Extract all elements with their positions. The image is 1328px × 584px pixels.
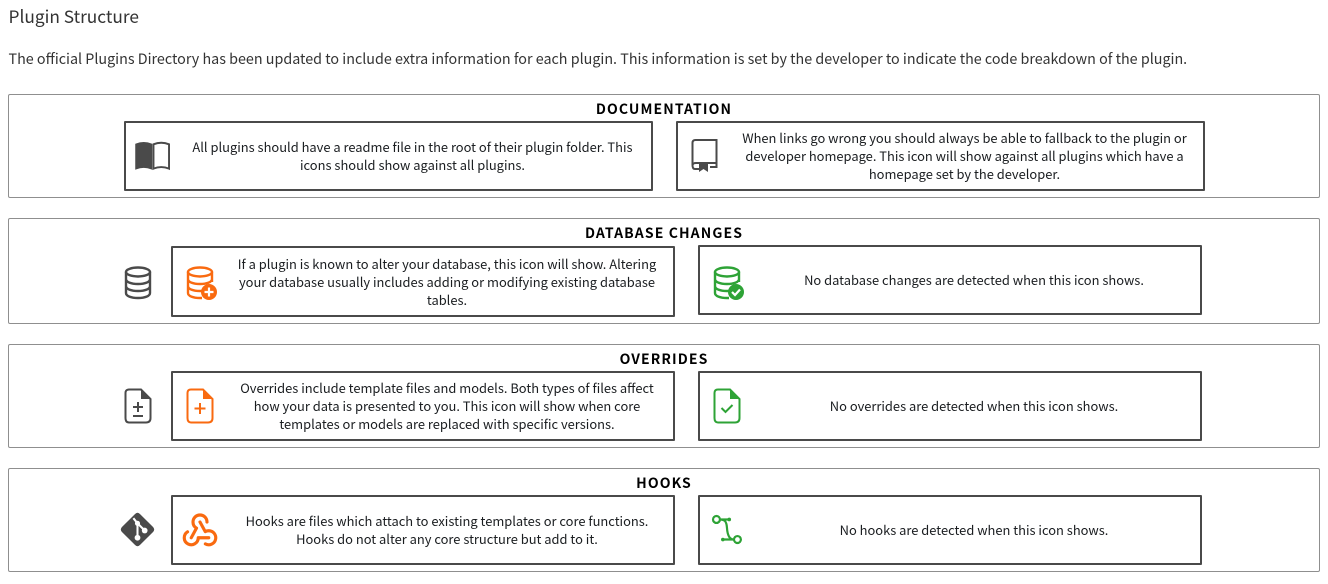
- text: no database changes: No database changes are detected when this icon shows.: [804, 270, 1144, 289]
- icon: git diamond: [120, 512, 154, 546]
- icon: route nodes: [712, 514, 742, 544]
- text: no overrides: No overrides are detected when this icon shows.: [830, 396, 1118, 415]
- text: readme: All plugins should have a readme file in the root of their plugin folder. This: [192, 137, 633, 156]
- icon: file check: [714, 388, 740, 424]
- icon: database: [124, 266, 152, 300]
- text: no hooks: No hooks are detected when this icon shows.: [840, 520, 1108, 539]
- text: readme: [192, 137, 633, 174]
- heading: documentation: DOCUMENTATION: [596, 99, 732, 119]
- text: homepage: When links go wrong you should always be able to fallback to the plugin or: [742, 128, 1187, 147]
- text: hooks found: Hooks are files which attach to existing templates or core functions.: [246, 511, 648, 530]
- card: hooks found: [171, 495, 675, 565]
- text: overrides found: Overrides include template files and models. Both types of files affect: [240, 378, 654, 397]
- icon: file plus: [186, 388, 214, 424]
- heading: hooks: HOOKS: [636, 473, 692, 493]
- text: overrides found: [240, 378, 654, 433]
- text: hooks found: Hooks do not alter any core structure but add to it.: [296, 529, 598, 548]
- text: homepage: homepage set by the developer.: [869, 164, 1060, 183]
- icon: database plus: [186, 266, 217, 300]
- panel: database changes: [8, 218, 1320, 324]
- card: overrides found: [171, 371, 675, 441]
- text: database altered: [238, 254, 656, 309]
- icon: open book: [135, 142, 170, 170]
- panel: overrides: [8, 344, 1320, 448]
- text: database altered: tables.: [427, 290, 467, 309]
- text: homepage: [742, 128, 1187, 183]
- icon: bookmarked book: [692, 139, 718, 172]
- panel: hooks: [8, 468, 1320, 572]
- icon: database check: [714, 266, 744, 300]
- card: no hooks: [698, 495, 1202, 565]
- text: database altered: If a plugin is known to alter your database, this icon will show. Altering: [238, 254, 656, 273]
- text: database altered: your database usually includes adding or modifying existing database: [239, 272, 655, 291]
- icon: webhook: [182, 513, 218, 546]
- panel: documentation: [8, 94, 1320, 198]
- text: hooks found: [246, 511, 648, 548]
- title: Plugin Structure: [8, 3, 139, 28]
- intro paragraph: The official Plugins Directory has been updated to include extra information for each plugin. This information is set by the developer to indicate the code breakdown of the plugin.: [8, 48, 1187, 69]
- card: no database changes: [698, 245, 1202, 315]
- heading: overrides: OVERRIDES: [620, 349, 708, 369]
- heading: database changes: DATABASE CHANGES: [585, 223, 743, 243]
- text: homepage: developer homepage. This icon will show against all plugins which have a: [745, 146, 1184, 165]
- card: readme: [124, 121, 653, 191]
- text: readme: icons should show against all plugins.: [300, 155, 525, 174]
- card: no overrides: [698, 371, 1202, 441]
- card: database altered: [171, 246, 675, 317]
- text: overrides found: templates or models are replaced with specific versions.: [279, 414, 615, 433]
- card: homepage: [676, 121, 1205, 191]
- text: overrides found: how your data is presented to you. This icon will show when core: [254, 396, 640, 415]
- icon: file plus-minus: [124, 388, 152, 424]
